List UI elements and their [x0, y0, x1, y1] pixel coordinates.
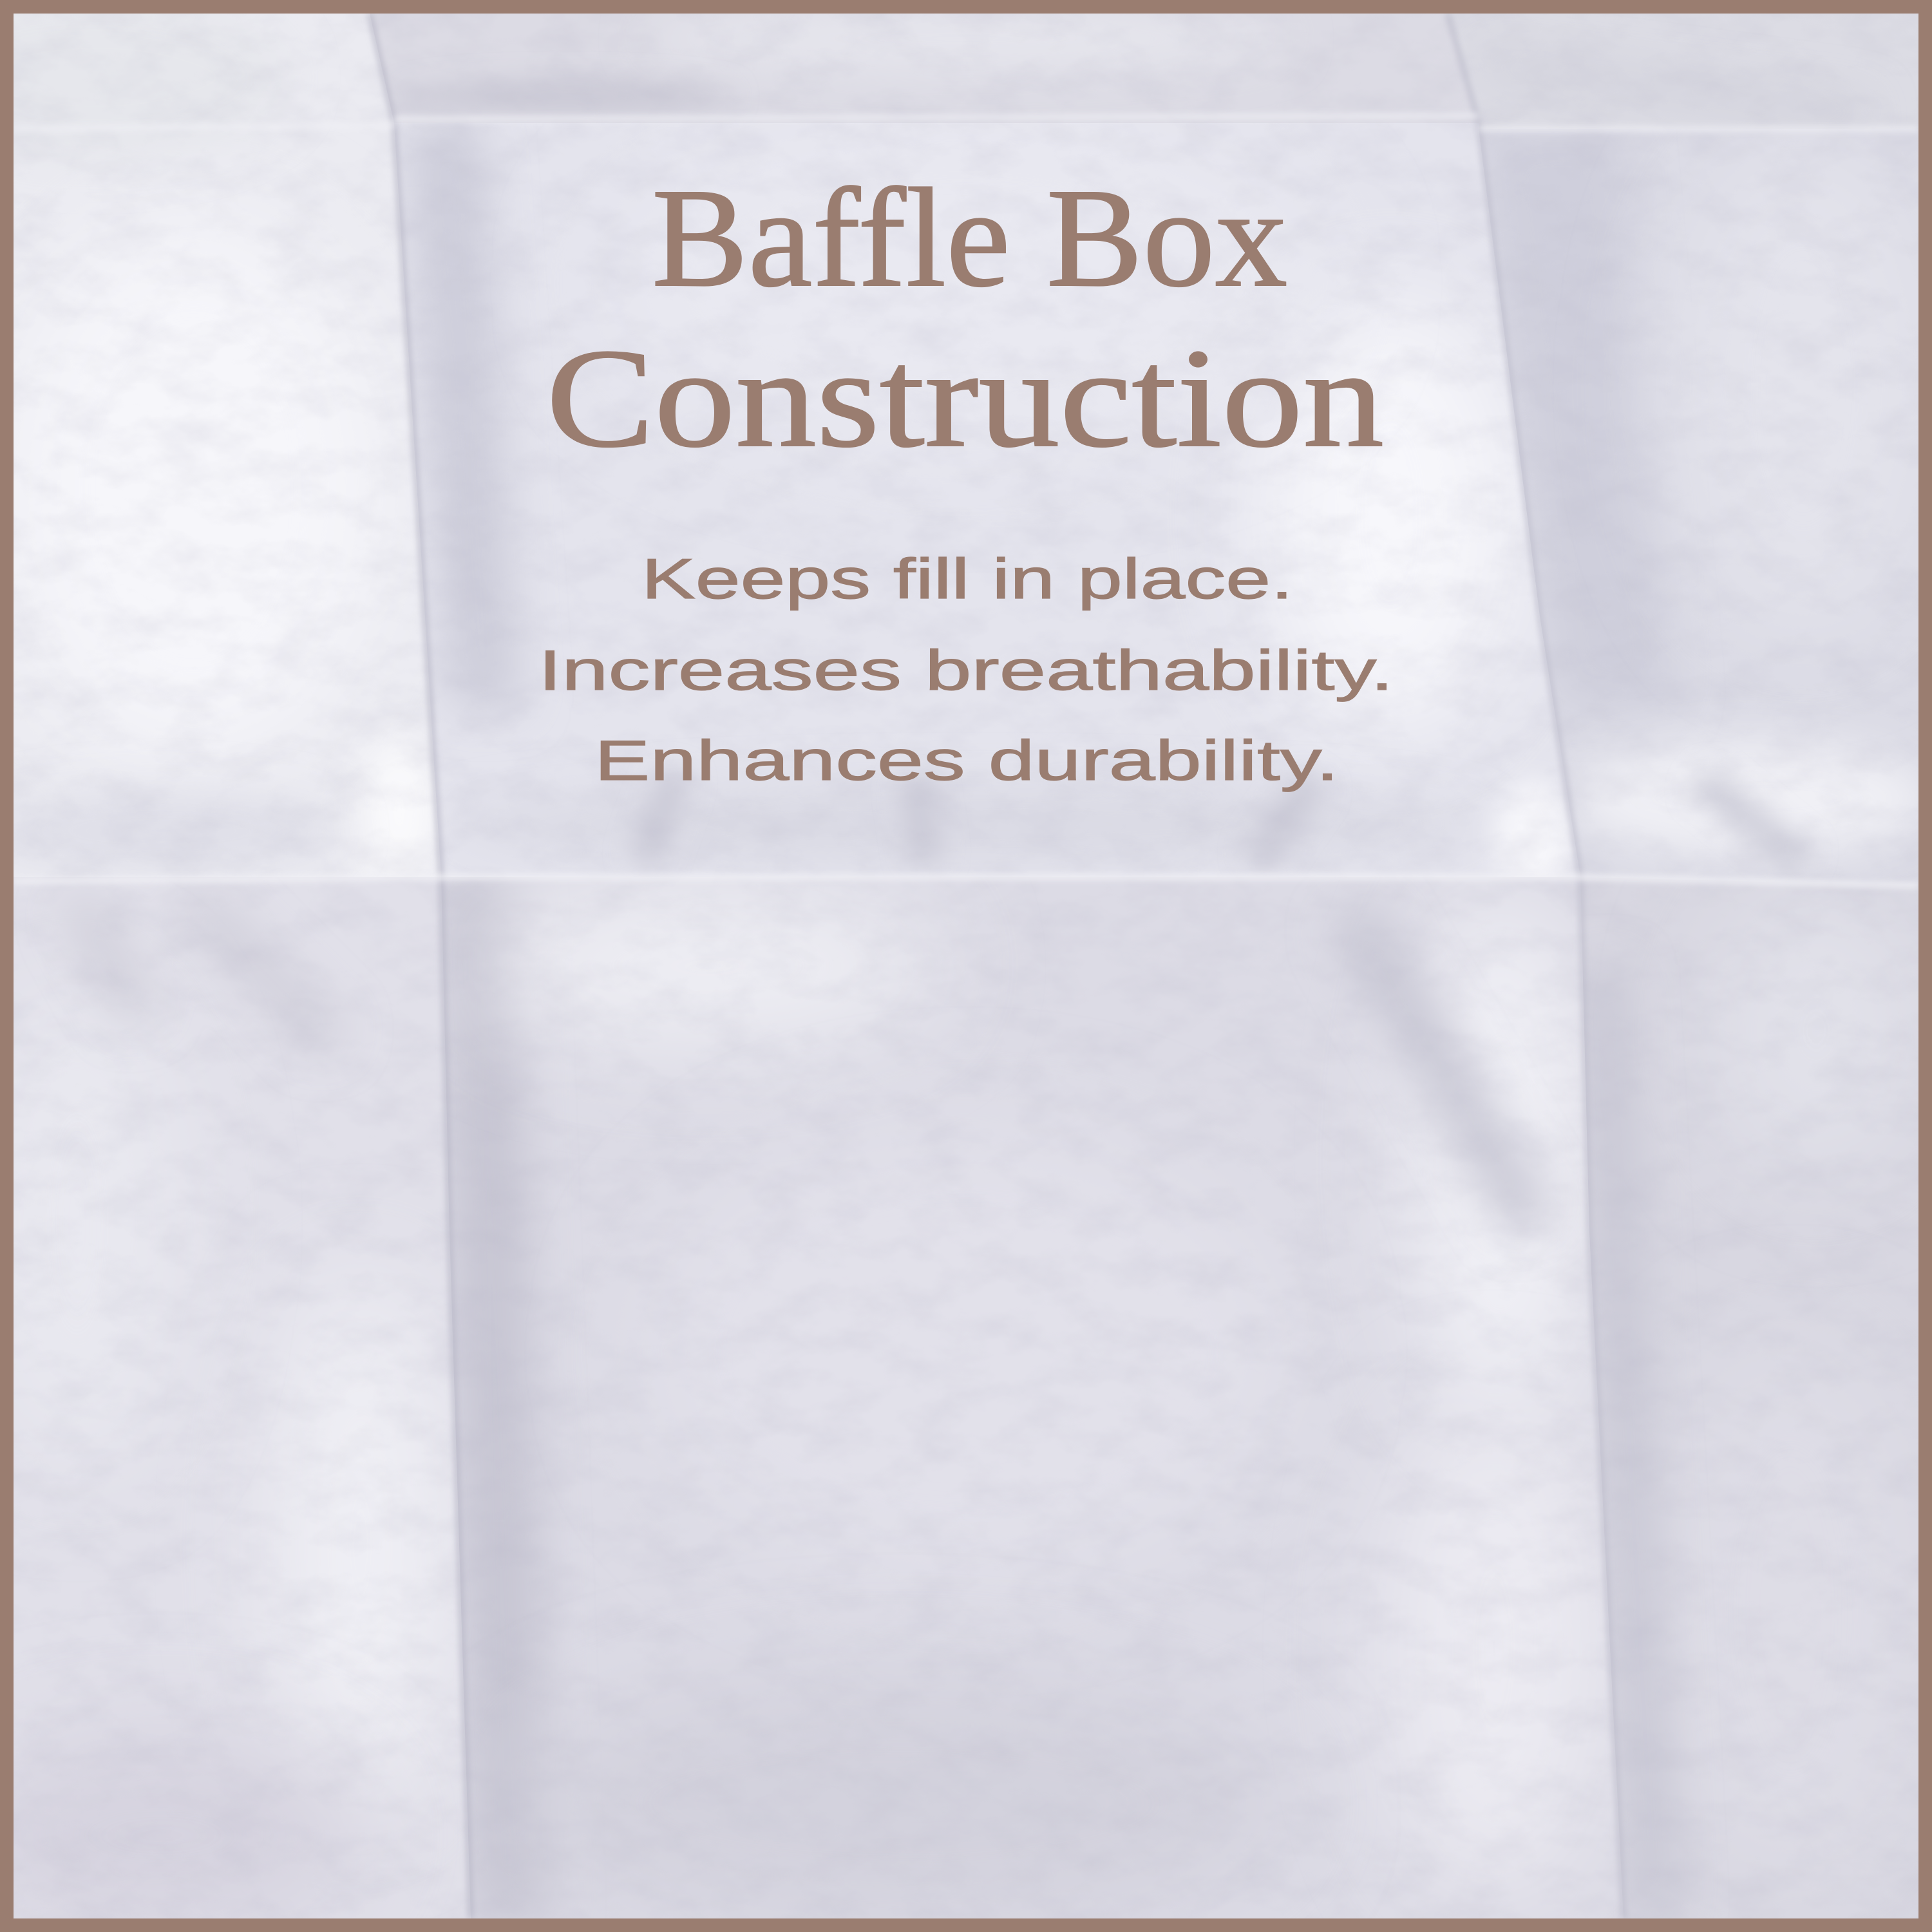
- centre column, lower quilt box: [425, 863, 1649, 1932]
- left column, upper quilt box: [14, 14, 440, 877]
- centre column, top band: [402, 66, 732, 116]
- benefits text block: [538, 547, 1394, 792]
- right column, upper quilt box: [1468, 116, 1932, 902]
- right column, lower quilt box: [1571, 863, 1932, 1932]
- vertical stitched seam, right: [1448, 14, 1624, 1918]
- title: [546, 159, 1384, 477]
- vertical stitched seam, left: [370, 14, 471, 1918]
- benefit: increases breathability: Increases breathability.: [538, 638, 1394, 702]
- title line 1: Baffle Box: [652, 159, 1287, 316]
- right column, top band: [1417, 0, 1932, 135]
- title line 2: Construction: [546, 319, 1384, 477]
- horizontal stitched seam, upper: [14, 116, 1918, 129]
- horizontal stitched seam, middle: [14, 877, 1918, 886]
- benefit: enhances durability: Enhances durability.: [594, 728, 1339, 792]
- benefit: keeps fill in place: Keeps fill in place.: [641, 547, 1293, 611]
- left column, lower quilt box: [0, 863, 515, 1932]
- centre column, upper quilt box: [374, 109, 1597, 895]
